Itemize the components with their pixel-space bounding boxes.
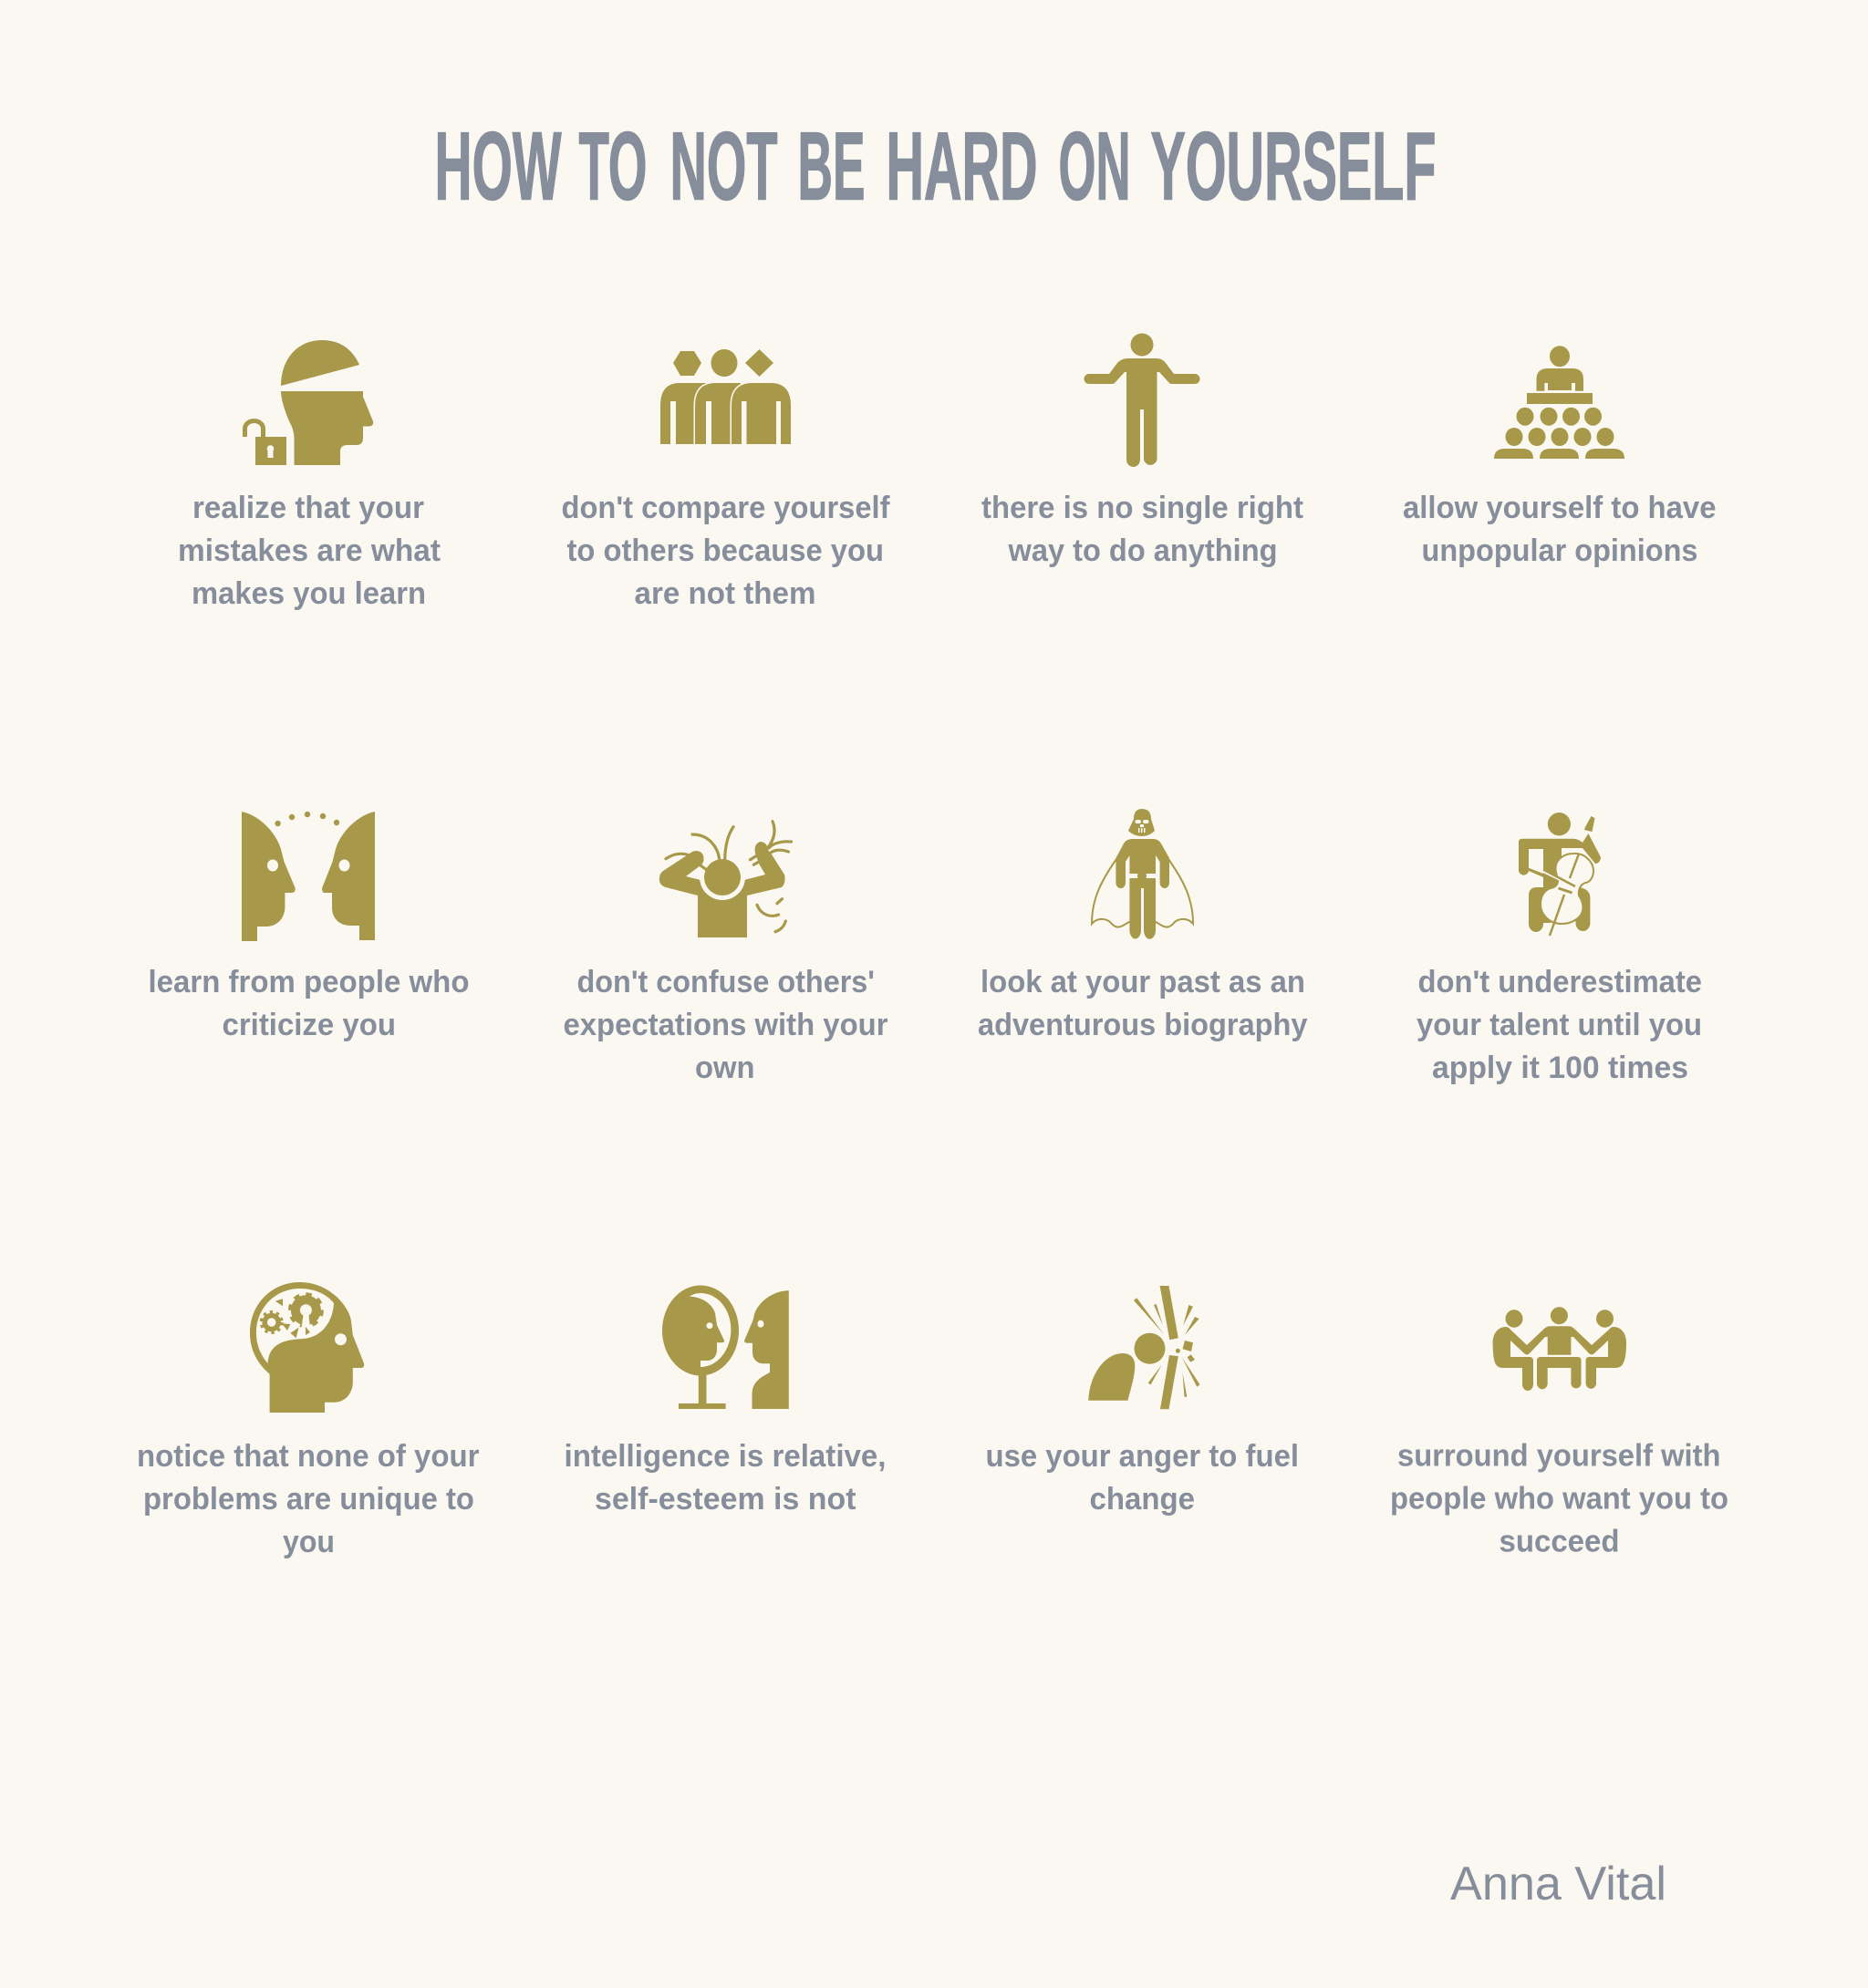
title: ON xyxy=(1058,113,1131,221)
caption: realize that your mistakes xyxy=(178,491,441,611)
panel: adventurous biography xyxy=(978,809,1308,1042)
caption: intelligence and self-esteem xyxy=(564,1439,887,1517)
title: BE xyxy=(797,113,865,221)
panel: learn from critics xyxy=(148,812,469,1042)
caption: realize that your mistakes: makes you learn xyxy=(192,576,426,611)
caption: supportive people xyxy=(1390,1439,1728,1559)
icon: two facing heads with dotted arc xyxy=(242,812,375,941)
caption: adventurous biography: look at your past as an xyxy=(981,965,1305,999)
caption: underestimate talent xyxy=(1417,965,1702,1085)
caption: problems not unique: problems are unique to xyxy=(143,1482,474,1517)
panel: others' expectations xyxy=(564,822,888,1085)
caption: supportive people: succeed xyxy=(1500,1525,1620,1559)
icon: person breaking a board with head xyxy=(1088,1286,1200,1409)
caption: anger fuels change: change xyxy=(1089,1482,1195,1517)
caption: no single right way xyxy=(981,491,1303,568)
icon: seated cellist xyxy=(1519,813,1601,936)
title: HOW xyxy=(434,113,562,221)
icon: person facing a mirror xyxy=(662,1286,789,1409)
title: TO xyxy=(578,113,648,221)
caption: learn from critics: criticize you xyxy=(223,1008,396,1042)
caption: intelligence and self-esteem: intelligence is relative, xyxy=(564,1439,887,1474)
icon: three seated people holding hands xyxy=(1493,1307,1626,1391)
caption: adventurous biography: adventurous biography xyxy=(978,1008,1308,1042)
caption: no single right way: there is no single right xyxy=(981,491,1303,525)
caption: unpopular opinions: unpopular opinions xyxy=(1421,533,1698,568)
panel: no single right way xyxy=(981,334,1303,568)
caption: supportive people: surround yourself with xyxy=(1397,1439,1720,1474)
caption: learn from critics: learn from people who xyxy=(148,965,469,999)
caption: don't compare yourself: don't compare yourself xyxy=(562,491,890,525)
caption: supportive people: people who want you to xyxy=(1390,1481,1728,1516)
caption: others' expectations: expectations with your xyxy=(564,1008,888,1042)
caption: others' expectations: own xyxy=(695,1051,755,1085)
caption: others' expectations xyxy=(564,965,888,1085)
caption: others' expectations: don't confuse others' xyxy=(576,965,875,999)
caption: don't compare yourself xyxy=(562,491,890,611)
caption: learn from critics xyxy=(148,965,469,1042)
icon: caped figure in dark helmet xyxy=(1092,809,1193,939)
caption: no single right way: way to do anything xyxy=(1008,533,1277,568)
caption: don't compare yourself: are not them xyxy=(635,576,815,611)
caption: don't compare yourself: to others because you xyxy=(567,533,884,568)
icon: head with gears in the brain xyxy=(250,1282,364,1413)
panel: unpopular opinions xyxy=(1403,346,1717,568)
title: HARD xyxy=(887,113,1038,221)
caption: underestimate talent: your talent until you xyxy=(1417,1008,1702,1042)
panel: problems not unique xyxy=(137,1282,480,1559)
title xyxy=(434,113,1436,221)
icon: speaker at lectern before audience xyxy=(1494,346,1624,459)
panel: supportive people xyxy=(1390,1307,1728,1559)
caption: problems not unique: you xyxy=(283,1525,335,1559)
icon: open head with unlocked padlock xyxy=(244,340,373,465)
caption: problems not unique: notice that none of your xyxy=(137,1439,480,1474)
caption: underestimate talent: don't underestimate xyxy=(1417,965,1702,999)
caption: realize that your mistakes: realize that your xyxy=(192,491,424,525)
panel: don't compare yourself xyxy=(562,349,890,611)
caption: intelligence and self-esteem: self-esteem is not xyxy=(595,1482,856,1517)
caption: unpopular opinions: allow yourself to have xyxy=(1403,491,1717,525)
panel: realize that your mistakes xyxy=(178,340,441,611)
caption: realize that your mistakes: mistakes are what xyxy=(178,533,441,568)
icon: person pulling out hair xyxy=(659,822,792,937)
icon: person shrugging with arms out xyxy=(1084,334,1200,467)
caption: anger fuels change xyxy=(985,1439,1299,1517)
caption: unpopular opinions xyxy=(1403,491,1717,568)
panel: underestimate talent xyxy=(1417,813,1702,1085)
title: NOT xyxy=(669,113,777,221)
caption: problems not unique xyxy=(137,1439,480,1559)
caption: underestimate talent: apply it 100 times xyxy=(1432,1051,1688,1085)
title: YOURSELF xyxy=(1151,113,1436,221)
author signature: Anna Vital xyxy=(1450,1858,1666,1910)
panel: anger fuels change xyxy=(985,1286,1299,1517)
icon: three people with different heads xyxy=(660,349,791,444)
panel: intelligence and self-esteem xyxy=(564,1286,887,1517)
caption: adventurous biography xyxy=(978,965,1308,1042)
caption: anger fuels change: use your anger to fuel xyxy=(985,1439,1299,1474)
